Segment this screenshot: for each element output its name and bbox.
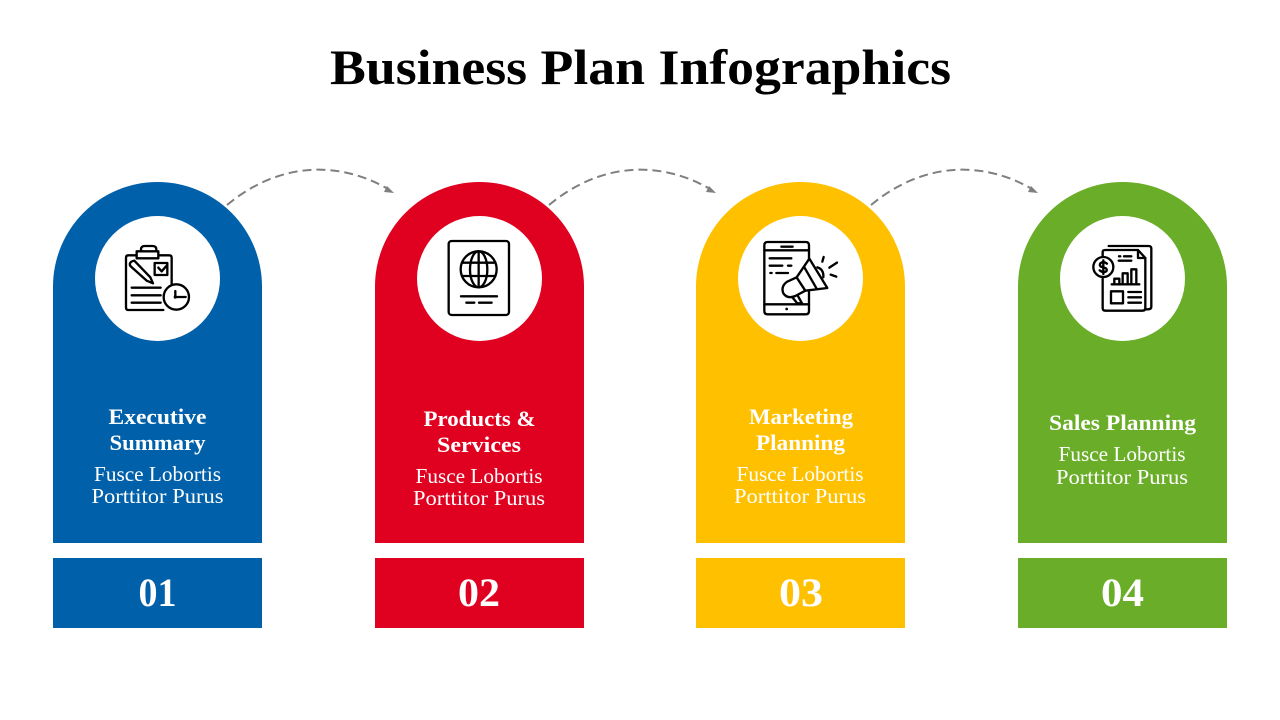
icon circle bbox=[417, 216, 542, 341]
card shape bbox=[696, 182, 905, 543]
number box 01: 01 bbox=[138, 570, 176, 615]
body text bbox=[413, 464, 545, 510]
number box 02 bbox=[375, 558, 584, 628]
heading: Marketing bbox=[749, 404, 853, 429]
icon: financial report with dollar coin bbox=[1093, 246, 1151, 311]
icon: phone with megaphone bbox=[764, 242, 837, 314]
panel: marketing planning bbox=[696, 182, 905, 543]
body text: Porttitor Purus bbox=[413, 486, 545, 510]
body text: Fusce Lobortis bbox=[1058, 442, 1186, 466]
body text: Porttitor Purus bbox=[1056, 465, 1188, 489]
icon circle bbox=[1060, 216, 1185, 341]
panel: executive summary bbox=[53, 182, 262, 543]
body text: Fusce Lobortis bbox=[416, 464, 542, 488]
heading: Services bbox=[437, 432, 521, 457]
heading: Planning bbox=[756, 430, 845, 455]
icon circle bbox=[95, 216, 220, 341]
heading: Products & bbox=[424, 406, 536, 431]
number box 03: 03 bbox=[779, 570, 823, 615]
body text bbox=[92, 462, 224, 508]
title: Business Plan Infographics bbox=[330, 39, 951, 95]
card shape bbox=[1018, 182, 1227, 543]
icon circle bbox=[738, 216, 863, 341]
number box 04 bbox=[1018, 558, 1227, 628]
body text bbox=[734, 462, 866, 508]
arrow: step 1 to 2 bbox=[227, 170, 394, 205]
heading bbox=[424, 406, 536, 457]
body text: Fusce Lobortis bbox=[736, 462, 864, 486]
icon: passport with globe bbox=[449, 241, 509, 315]
heading bbox=[108, 404, 207, 455]
card shape bbox=[375, 182, 584, 543]
card shape bbox=[53, 182, 262, 543]
body text: Fusce Lobortis bbox=[94, 462, 221, 486]
heading: Summary bbox=[110, 430, 206, 455]
panel: products and services bbox=[375, 182, 584, 543]
icon: clipboard with clock bbox=[126, 246, 189, 310]
body text: Porttitor Purus bbox=[92, 484, 224, 508]
body text bbox=[1056, 442, 1188, 489]
heading bbox=[749, 404, 853, 455]
number box 02: 02 bbox=[458, 570, 500, 615]
heading: Sales Planning bbox=[1049, 410, 1196, 435]
arrow: step 2 to 3 bbox=[549, 170, 716, 205]
body text: Porttitor Purus bbox=[734, 484, 866, 508]
panel: sales planning bbox=[1018, 182, 1227, 543]
number box 03 bbox=[696, 558, 905, 628]
number box 04: 04 bbox=[1101, 570, 1144, 615]
number box 01 bbox=[53, 558, 262, 628]
heading: Executive bbox=[108, 404, 207, 429]
arrow: step 3 to 4 bbox=[871, 170, 1038, 205]
